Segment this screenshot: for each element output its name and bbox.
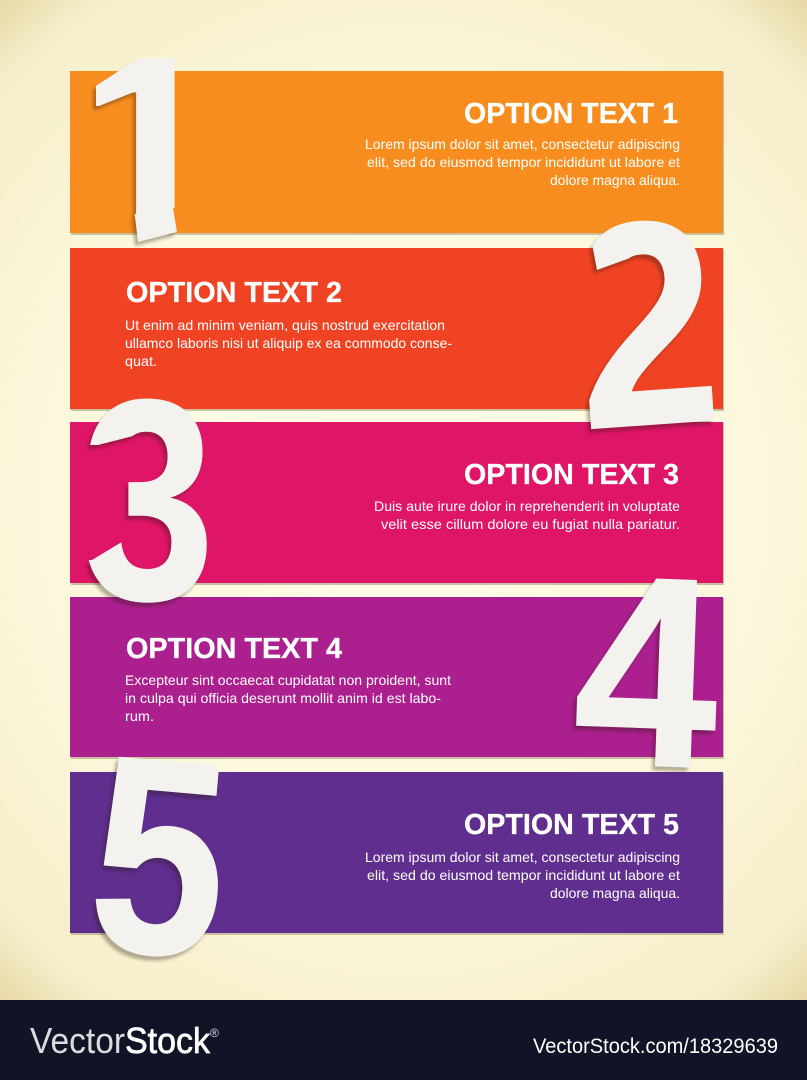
panel: option 2 xyxy=(70,248,724,411)
text block: option 2 description: Ut enim ad minim veniam, quis nostrud exercitation xyxy=(125,318,445,333)
panel: option 1 xyxy=(70,71,724,235)
numeral: paper 2: 2 xyxy=(565,157,728,490)
text block: option 1 description: Lorem ipsum dolor sit amet, consectetur adipiscing xyxy=(365,137,680,152)
text block: option 4 description: rum. xyxy=(125,709,154,724)
text block: option 4 description xyxy=(125,673,451,724)
text block: option 5 description: Lorem ipsum dolor sit amet, consectetur adipiscing xyxy=(365,850,680,865)
heading: option text 1: OPTION TEXT 1 xyxy=(464,98,678,130)
image id text: VectorStock.com/18329639 xyxy=(533,1035,778,1058)
heading: option text 3: OPTION TEXT 3 xyxy=(464,459,679,491)
numeral: paper 5: 5 xyxy=(80,696,240,1017)
text block: option 1 description: elit, sed do eiusmod tempor incididunt ut labore et xyxy=(367,155,680,170)
text block: option 4 description: in culpa qui officia deserunt mollit anim id est labo- xyxy=(125,691,441,706)
panel: option 5 xyxy=(70,772,724,935)
panel: option 4 xyxy=(70,597,724,759)
text block: option 3 description xyxy=(374,499,680,532)
heading: option text 4: OPTION TEXT 4 xyxy=(126,633,342,665)
heading: option text 5: OPTION TEXT 5 xyxy=(464,809,679,841)
logo: VectorStock: Stock xyxy=(125,1020,211,1061)
numeral: paper 4: 4 xyxy=(570,519,725,825)
numeral: paper 1: 1 xyxy=(75,2,223,299)
logo: VectorStock xyxy=(30,1020,219,1061)
text block: option 3 description: Duis aute irure dolor in reprehenderit in voluptate xyxy=(374,499,680,514)
text block: option 2 description xyxy=(125,318,452,369)
text block: option 4 description: Excepteur sint occaecat cupidatat non proident, sunt xyxy=(125,673,451,688)
text block: option 3 description: velit esse cillum dolore eu fugiat nulla pariatur. xyxy=(381,517,680,532)
heading: option text 2: OPTION TEXT 2 xyxy=(126,277,342,309)
text block: option 2 description: quat. xyxy=(125,354,157,369)
text block: option 5 description xyxy=(365,850,680,901)
logo: VectorStock: Vector xyxy=(30,1020,125,1061)
numeral: paper 3: 3 xyxy=(81,341,215,659)
text block: option 5 description: elit, sed do eiusmod tempor incididunt ut labore et xyxy=(367,868,680,883)
text block: option 1 description: dolore magna aliqua. xyxy=(550,173,680,188)
logo: VectorStock: ® xyxy=(210,1026,219,1040)
text block: option 2 description: ullamco laboris nisi ut aliquip ex ea commodo conse- xyxy=(125,336,452,351)
text block: option 5 description: dolore magna aliqua. xyxy=(550,886,680,901)
text block: option 1 description xyxy=(365,137,680,188)
panel: option 3 xyxy=(70,422,724,585)
footer bar xyxy=(0,1000,807,1080)
